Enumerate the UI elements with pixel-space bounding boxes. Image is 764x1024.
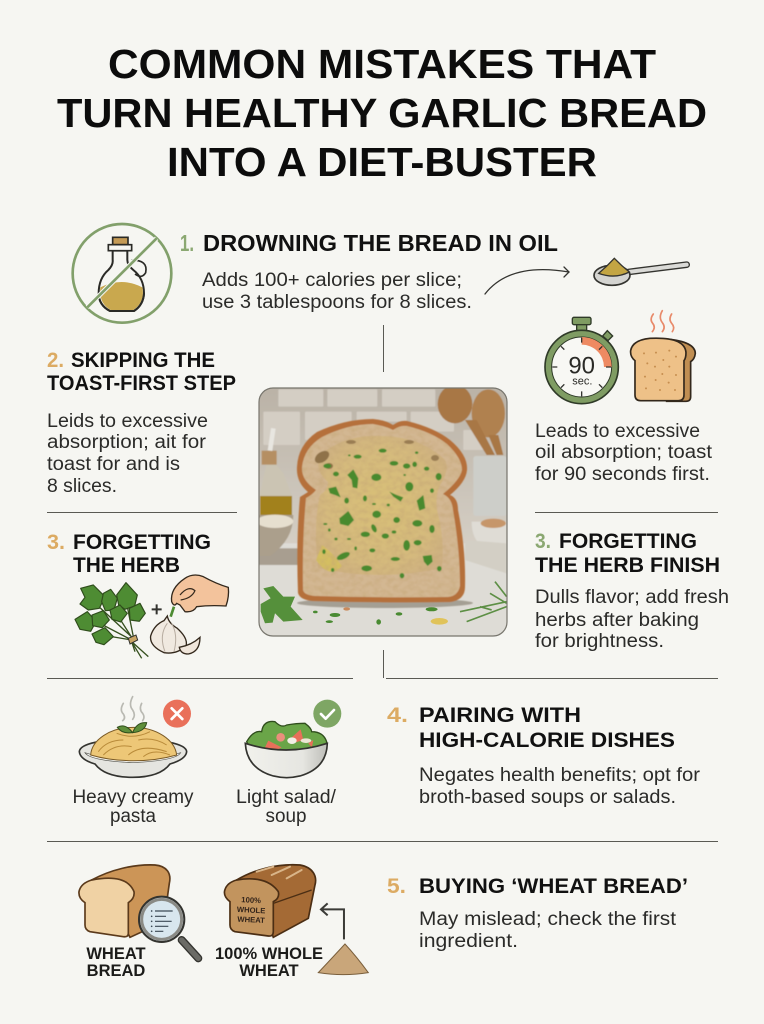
icon: salad bowl with green check bbox=[245, 700, 341, 778]
icon: whole wheat loaf with flour pile: WHOLE bbox=[237, 905, 266, 915]
icon: parsley bunch plus garlic and hand bbox=[75, 575, 229, 658]
heading: mistake 1: 1. bbox=[180, 230, 194, 256]
heading: mistake 2: 2. bbox=[47, 348, 64, 372]
text: mistake 4: broth-based soups or salads. bbox=[419, 787, 676, 808]
text: mistake 1: Adds 100+ calories per slice; bbox=[202, 270, 462, 291]
label: 100% whole wheat bbox=[215, 945, 323, 980]
heading: mistake 3 left: 3. bbox=[47, 530, 65, 554]
wooden spoons bbox=[438, 385, 472, 423]
text: mistake 5: May mislead; check the first bbox=[419, 909, 677, 930]
text: mistake 2: absorption; ait for bbox=[47, 432, 207, 453]
icon: spoon with garlic paste bbox=[594, 258, 687, 285]
heading: mistake 3 left: THE HERB bbox=[73, 553, 180, 577]
heading: mistake 2 bbox=[47, 348, 236, 395]
label: wheat bread: WHEAT bbox=[86, 945, 146, 963]
photo border bbox=[259, 388, 507, 636]
title bbox=[57, 41, 707, 185]
text: herb finish bbox=[535, 587, 729, 652]
label: wheat bread: BREAD bbox=[87, 962, 145, 980]
caption: heavy creamy pasta: pasta bbox=[110, 806, 156, 827]
text: herb finish: herbs after baking bbox=[535, 610, 699, 631]
arrow: to spoon bbox=[485, 267, 569, 294]
heading: mistake 3 right bbox=[535, 529, 720, 577]
title: TURN HEALTHY GARLIC BREAD bbox=[57, 90, 707, 136]
text: herb finish: Dulls flavor; add fresh bbox=[535, 587, 729, 608]
caption: heavy creamy pasta: Heavy creamy bbox=[72, 787, 194, 808]
heading: mistake 4 bbox=[387, 703, 675, 752]
jar bbox=[473, 456, 507, 516]
parsley flecks bbox=[322, 449, 442, 578]
text: toast first bbox=[535, 421, 713, 485]
icon: crossed-out oil bottle bbox=[73, 224, 171, 323]
heading: mistake 3 left: FORGETTING bbox=[73, 530, 211, 554]
heading: mistake 3 left bbox=[47, 530, 211, 577]
icon: 90 second stopwatch: sec. bbox=[572, 376, 592, 388]
text: mistake 2 bbox=[47, 411, 208, 497]
heading: mistake 4: 4. bbox=[387, 703, 408, 727]
text: herb finish: for brightness. bbox=[535, 631, 664, 652]
icon: whole wheat loaf with flour pile: 100% bbox=[241, 895, 261, 905]
label: 100% whole wheat: WHEAT bbox=[239, 962, 299, 980]
text: mistake 4 bbox=[419, 765, 701, 808]
icon: whole wheat loaf with flour pile bbox=[224, 865, 368, 975]
heading: mistake 2: TOAST-FIRST STEP bbox=[47, 371, 236, 395]
icon: pasta bowl with red cross bbox=[79, 697, 191, 777]
text: mistake 4: Negates health benefits; opt for bbox=[419, 765, 701, 786]
text: toast first: Leads to excessive bbox=[535, 421, 700, 442]
icon: 90 second stopwatch: 90 bbox=[568, 352, 595, 379]
text: mistake 2: toast for and is bbox=[47, 454, 180, 475]
icon: whole wheat loaf with flour pile: WHEAT bbox=[237, 915, 265, 925]
icon: wheat bread with magnifier bbox=[79, 865, 198, 958]
caption: light salad or soup: Light salad/ bbox=[236, 787, 337, 808]
heading: mistake 5: BUYING ‘WHEAT BREAD’ bbox=[419, 874, 688, 898]
heading: mistake 2: SKIPPING THE bbox=[71, 348, 215, 372]
parsley and rosemary on table bbox=[261, 582, 507, 625]
caption: light salad or soup bbox=[236, 787, 337, 827]
text: mistake 1: use 3 tablespoons for 8 slices. bbox=[202, 292, 472, 313]
heading: mistake 5: 5. bbox=[387, 874, 406, 898]
oil bottle bbox=[261, 494, 290, 495]
heading: mistake 3 right: 3. bbox=[535, 529, 551, 553]
icon: hot toast bbox=[631, 311, 695, 401]
left bowl bbox=[260, 514, 294, 549]
caption: heavy creamy pasta bbox=[72, 787, 194, 827]
label: 100% whole wheat: 100% WHOLE bbox=[215, 945, 323, 963]
icon: 90 second stopwatch bbox=[545, 317, 618, 404]
text: mistake 1 bbox=[202, 270, 472, 313]
bread slice bbox=[297, 419, 467, 602]
tiles bbox=[263, 389, 483, 450]
heading: mistake 4: HIGH-CALORIE DISHES bbox=[419, 728, 675, 752]
title: INTO A DIET-BUSTER bbox=[167, 139, 597, 185]
text: mistake 2: 8 slices. bbox=[47, 476, 117, 497]
text: mistake 2: Leids to excessive bbox=[47, 411, 208, 432]
photo: garlic bread slice bbox=[260, 388, 506, 636]
text: toast first: for 90 seconds first. bbox=[535, 464, 710, 485]
text: toast first: oil absorption; toast bbox=[535, 442, 713, 463]
caption: light salad or soup: soup bbox=[266, 806, 306, 827]
heading: mistake 4: PAIRING WITH bbox=[419, 703, 581, 727]
heading: mistake 1: DROWNING THE BREAD IN OIL bbox=[203, 230, 558, 256]
text: mistake 5 bbox=[419, 909, 677, 952]
label: wheat bread bbox=[86, 945, 146, 980]
heading: mistake 3 right: FORGETTING bbox=[559, 529, 697, 553]
right bowl and towel bbox=[472, 522, 506, 543]
title: COMMON MISTAKES THAT bbox=[108, 41, 656, 87]
heading: mistake 3 right: THE HERB FINISH bbox=[535, 553, 720, 577]
text: mistake 5: ingredient. bbox=[419, 931, 518, 952]
